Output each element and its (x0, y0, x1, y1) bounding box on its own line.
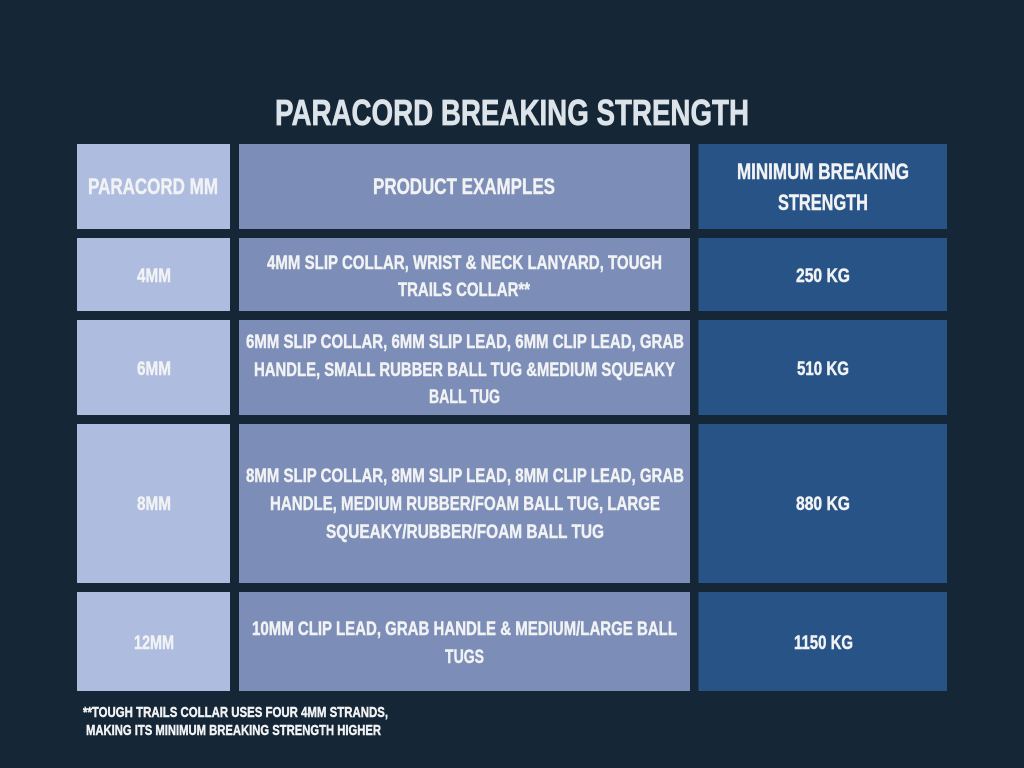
size cell: 8mm (77, 424, 230, 583)
table (77, 144, 947, 691)
row: 4mm (77, 238, 947, 311)
header cell: product examples (239, 144, 690, 229)
products cell: 6mm: BALL TUG (429, 387, 500, 408)
row: 6mm (77, 320, 947, 415)
footnote: MAKING ITS MINIMUM BREAKING STRENGTH HIGHER (86, 723, 381, 739)
row: 8mm (77, 424, 947, 583)
strength cell: 510 kg: 510 KG (797, 359, 849, 380)
strength cell: 1150 kg (698, 592, 947, 691)
products cell: 6mm: HANDLE, SMALL RUBBER BALL TUG &MEDIUM SQUEAKY (254, 360, 675, 381)
header cell: paracord mm: PARACORD MM (88, 174, 218, 199)
products cell: 4mm (239, 238, 690, 311)
size cell: 12mm: 12MM (134, 633, 174, 654)
products cell: 12mm: TUGS (445, 647, 484, 668)
products cell: 8mm: 8MM SLIP COLLAR, 8MM SLIP LEAD, 8MM CLIP LEAD, GRAB (246, 466, 684, 487)
products cell: 8mm (239, 424, 690, 583)
products cell: 6mm: 6MM SLIP COLLAR, 6MM SLIP LEAD, 6MM CLIP LEAD, GRAB (246, 332, 684, 353)
footnote (83, 705, 388, 739)
products cell: 6mm (239, 320, 690, 415)
size cell: 4mm (77, 238, 230, 311)
size cell: 8mm: 8MM (137, 494, 171, 515)
strength cell: 250 kg (698, 238, 947, 311)
header cell: minimum breaking strength (698, 144, 947, 229)
strength cell: 880 kg (698, 424, 947, 583)
products cell: 12mm: 10MM CLIP LEAD, GRAB HANDLE & MEDIUM/LARGE BALL (252, 619, 677, 640)
size cell: 6mm (77, 320, 230, 415)
footnote: **TOUGH TRAILS COLLAR USES FOUR 4MM STRANDS, (83, 705, 388, 721)
products cell: 8mm: SQUEAKY/RUBBER/FOAM BALL TUG (326, 522, 604, 543)
header cell: minimum breaking strength: STRENGTH (778, 190, 868, 215)
products cell: 12mm (239, 592, 690, 691)
header cell: product examples: PRODUCT EXAMPLES (373, 174, 555, 199)
strength cell: 1150 kg: 1150 KG (794, 633, 853, 654)
products cell: 4mm: 4MM SLIP COLLAR, WRIST & NECK LANYARD, TOUGH (267, 253, 662, 274)
title: PARACORD BREAKING STRENGTH (275, 92, 749, 133)
products cell: 8mm: HANDLE, MEDIUM RUBBER/FOAM BALL TUG, LARGE (270, 494, 660, 515)
strength cell: 510 kg (698, 320, 947, 415)
header cell: paracord mm (77, 144, 230, 229)
size cell: 6mm: 6MM (137, 359, 171, 380)
size cell: 4mm: 4MM (137, 266, 171, 287)
header cell: minimum breaking strength: MINIMUM BREAKING (737, 159, 909, 184)
header row (77, 144, 947, 229)
products cell: 4mm: TRAILS COLLAR** (398, 280, 530, 301)
strength cell: 250 kg: 250 KG (796, 266, 850, 287)
row: 12mm (77, 592, 947, 691)
strength cell: 880 kg: 880 KG (796, 494, 850, 515)
size cell: 12mm (77, 592, 230, 691)
